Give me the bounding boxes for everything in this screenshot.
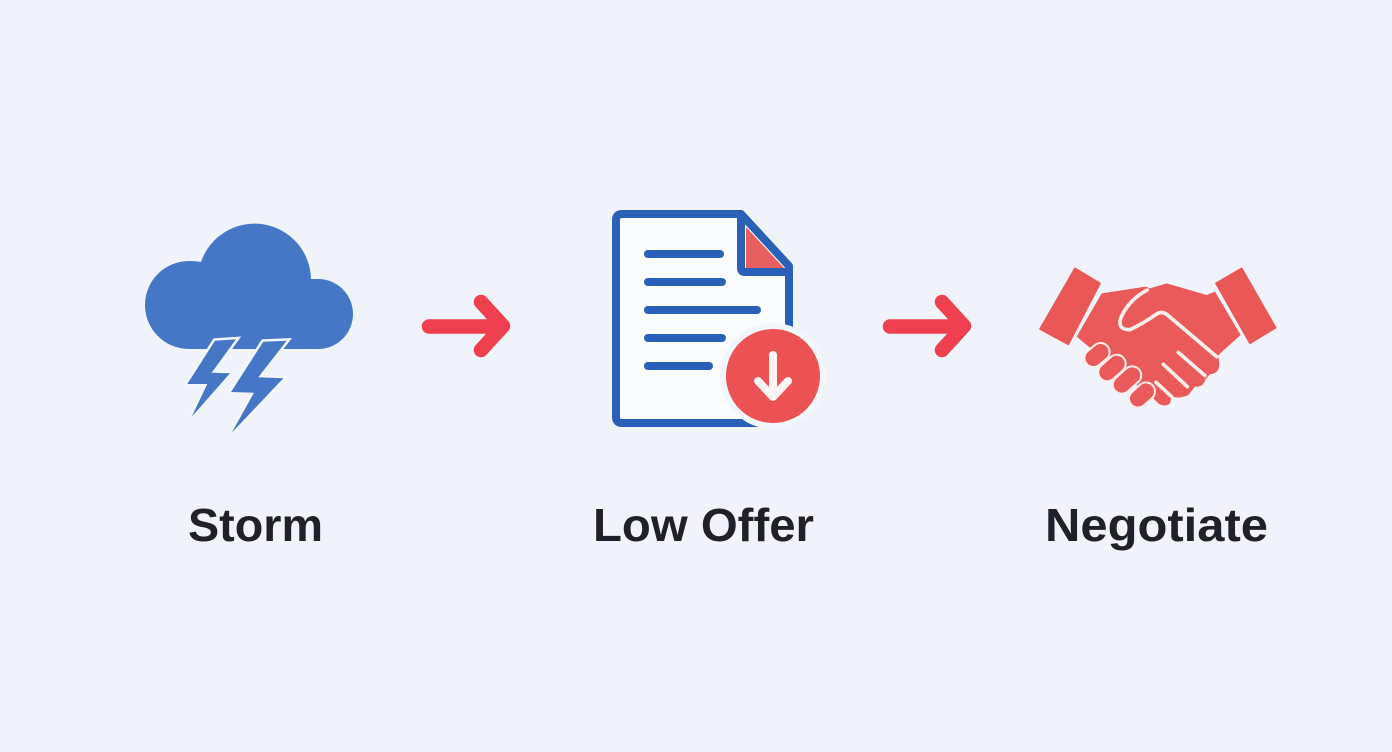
- label: Storm: Storm: [188, 499, 323, 551]
- label: Low Offer: Low Offer: [593, 499, 814, 551]
- arrow: storm to low offer: [429, 302, 503, 350]
- label: Negotiate: Negotiate: [1045, 499, 1268, 551]
- arrow: low offer to negotiate: [890, 302, 964, 350]
- icon: document with down arrow badge: [616, 214, 826, 429]
- icon: handshake: [1040, 268, 1276, 410]
- icon: storm cloud with lightning: [145, 224, 353, 433]
